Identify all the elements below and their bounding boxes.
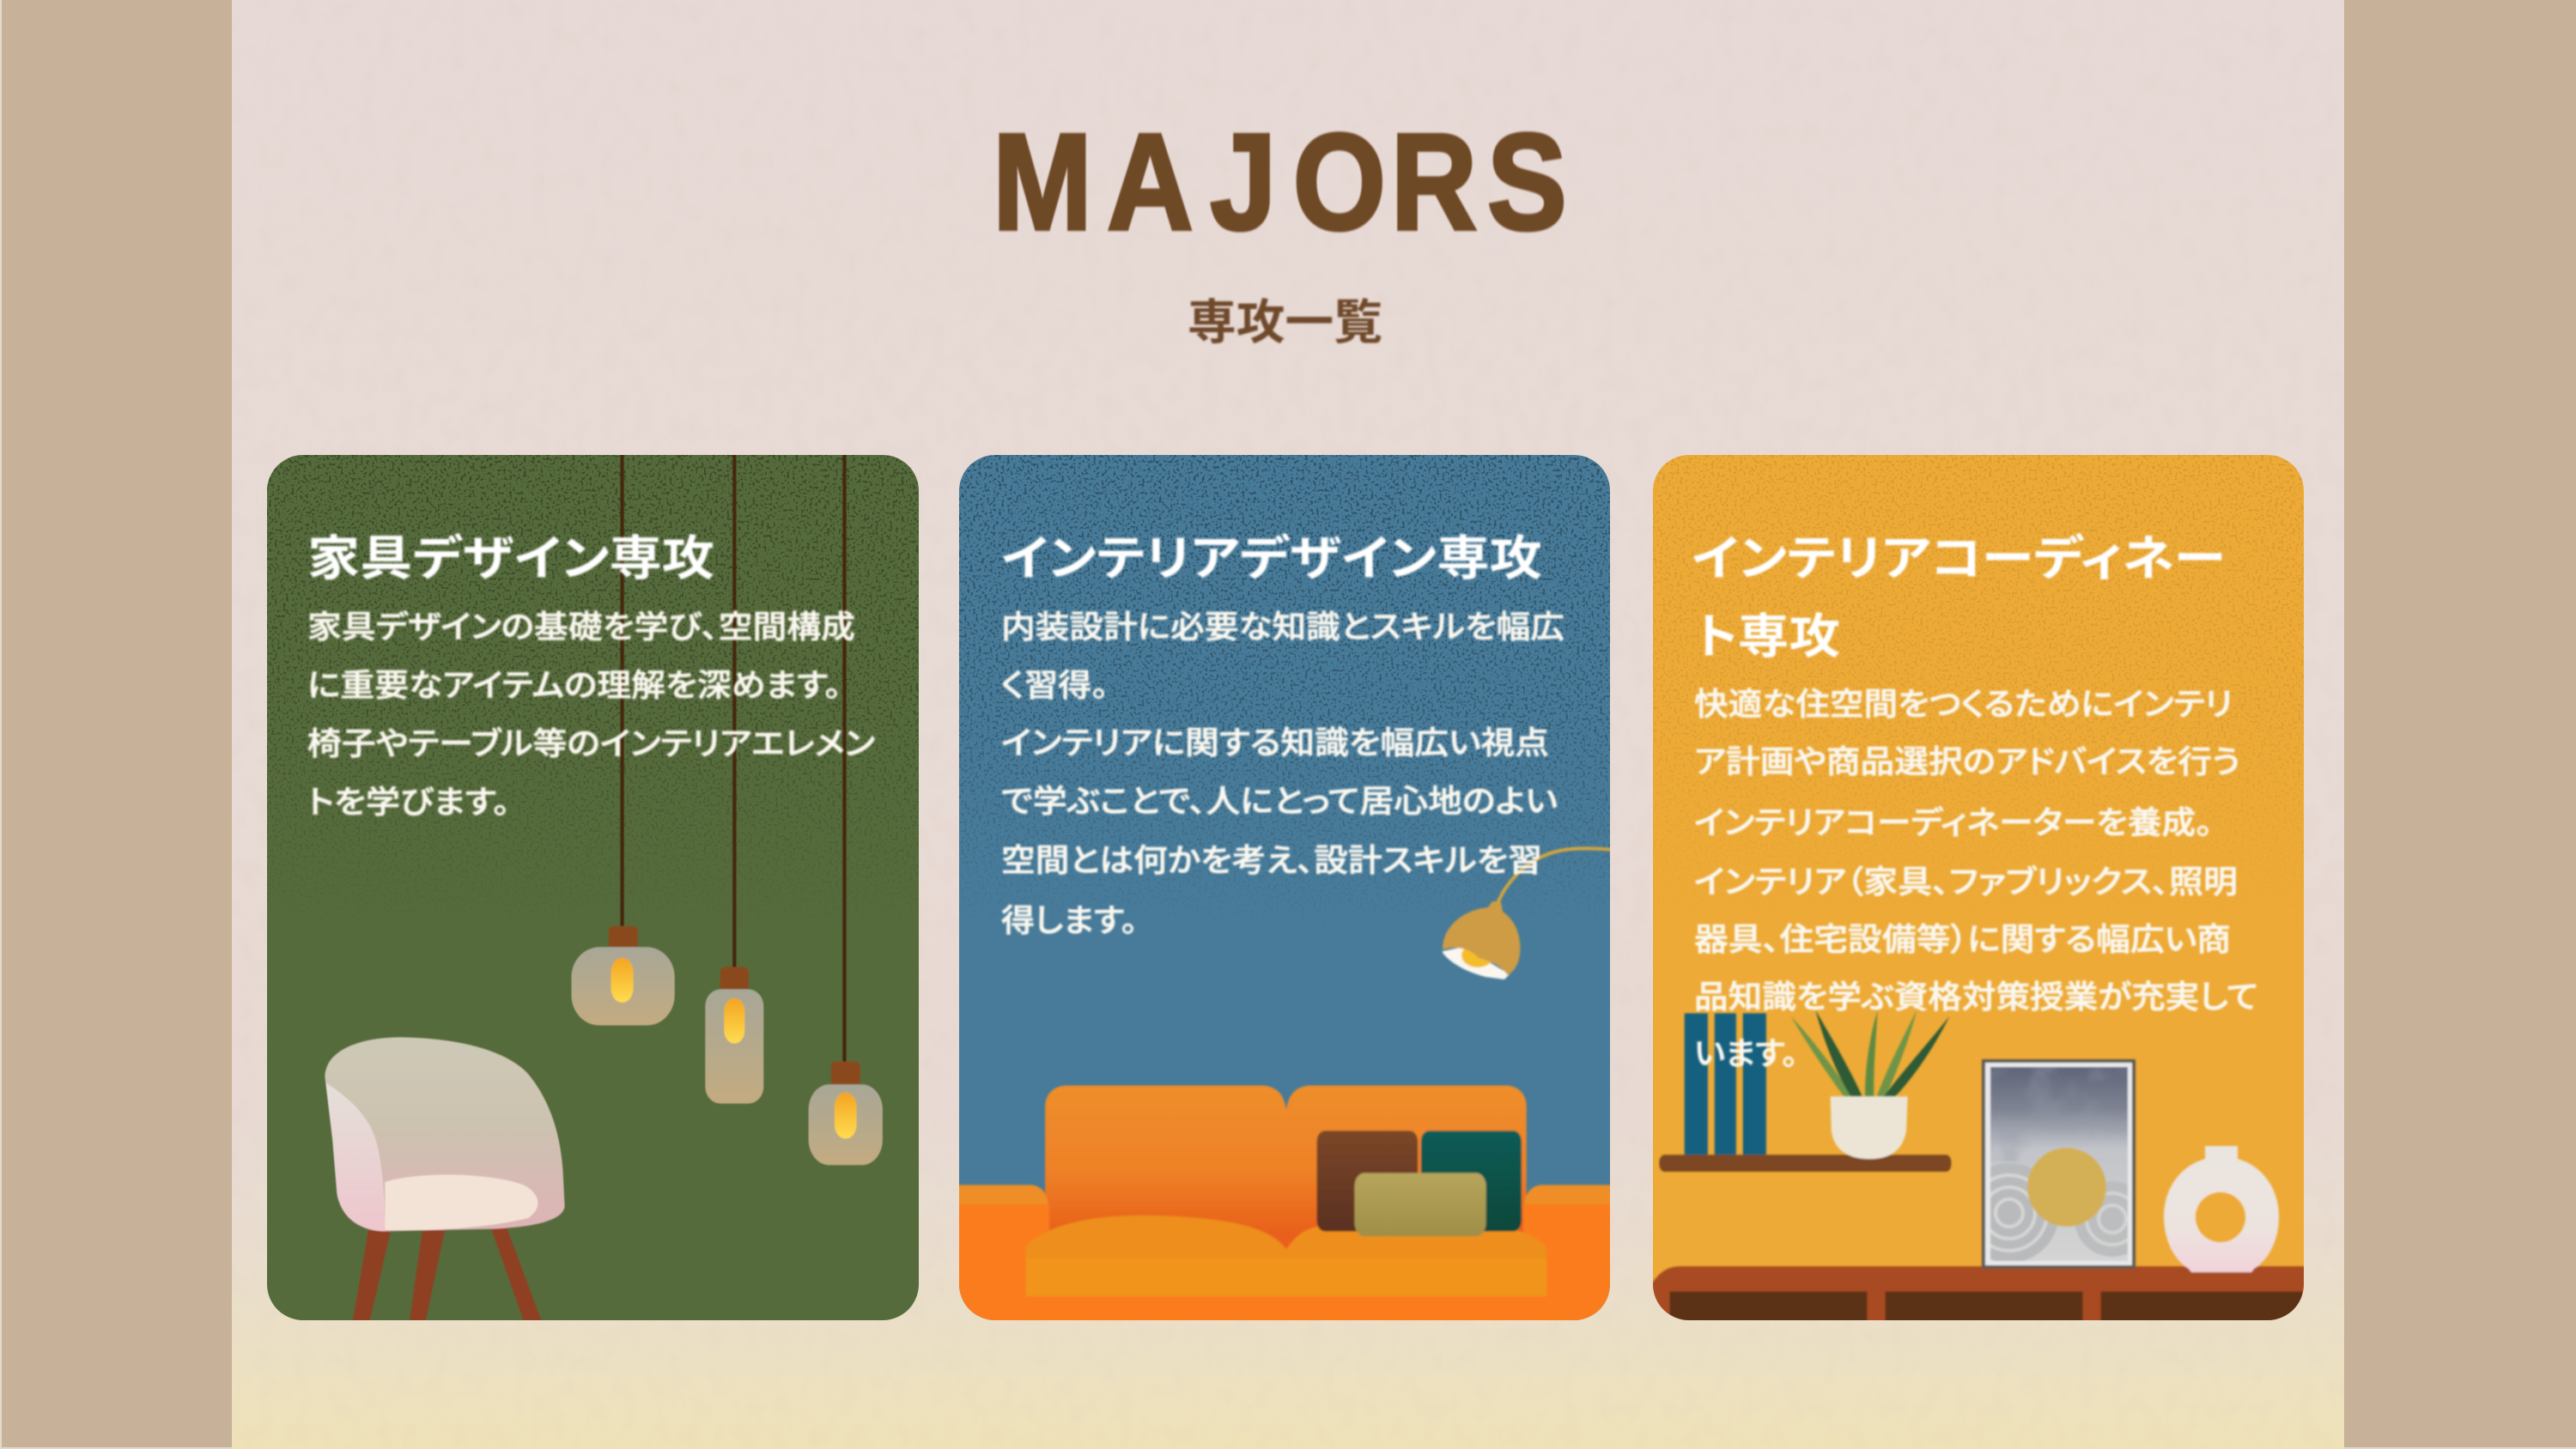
text block: interior design description: く習得。 (1001, 668, 1109, 703)
cushions (1317, 1131, 1522, 1236)
framed picture (1959, 1059, 2150, 1269)
vase (2164, 1146, 2279, 1272)
text block: interior design description: インテリアに関する知識を幅広い視点 (1001, 725, 1549, 761)
heading: interior design: インテリアデザイン専攻 (1001, 531, 1542, 585)
text block: furniture design description: トを学びます。 (307, 785, 510, 820)
cabinet (1649, 1266, 2310, 1332)
floor lamp (1443, 848, 1614, 979)
text block: interior design description (1001, 609, 1564, 938)
heading: interior coordinate: ト専攻 (1695, 609, 1840, 664)
text block: interior coordinate description: インテリア（家具、ファブリックス、照明 (1694, 864, 2238, 900)
text block: interior coordinate description: 品知識を学ぶ資格対策授業が充実して (1694, 979, 2258, 1015)
pendant lamp 1 (571, 447, 675, 1025)
pendant lamp 2 (705, 447, 763, 1104)
text block: interior coordinate description: 快適な住空間をつくるためにインテリ (1694, 687, 2233, 722)
panel: interior design major (954, 455, 1616, 1332)
text block: interior design description: で学ぶことで、人にとって居心地のよい (1001, 784, 1558, 819)
title: MAJORS (993, 105, 1567, 258)
chair (325, 1037, 565, 1326)
illustration: pendant lamps and chair (325, 447, 883, 1326)
text block: interior design description: 内装設計に必要な知識とスキルを幅広 (1001, 609, 1564, 645)
text block: furniture design description: 椅子やテーブル等のインテリアエレメン (307, 726, 875, 761)
text block: furniture design description: に重要なアイテムの理解を深めます。 (307, 668, 841, 703)
heading: interior coordinate: インテリアコーディネー (1692, 531, 2226, 585)
books (1685, 1013, 1766, 1155)
panel: interior coordinate major (1649, 455, 2310, 1332)
heading: interior coordinate (1692, 531, 2226, 664)
text block: interior coordinate description: ア計画や商品選択のアドバイスを行う (1694, 744, 2240, 779)
text block: interior coordinate description: 器具、住宅設備等）に関する幅広い商 (1694, 922, 2231, 957)
text block: furniture design description: 家具デザインの基礎を学び、空間構成 (307, 609, 855, 645)
sofa (954, 1086, 1616, 1332)
potted plant (1791, 1010, 1949, 1159)
text block: interior coordinate description: います。 (1694, 1036, 1798, 1071)
wall shelf (1659, 1155, 1951, 1172)
text block: interior design description: 得します。 (1001, 903, 1138, 938)
pendant lamp 3 (809, 447, 883, 1165)
illustration: shelf, plant, picture, vase, cabinet (1649, 1010, 2310, 1332)
text block: interior coordinate description: インテリアコーディネーターを養成。 (1694, 805, 2213, 840)
heading: furniture design: 家具デザイン専攻 (307, 531, 714, 585)
text block: interior coordinate description (1694, 687, 2258, 1071)
text block: furniture design description (307, 609, 875, 820)
illustration: sofa and floor lamp (954, 848, 1616, 1332)
subtitle: 専攻一覧 (1188, 295, 1382, 349)
panel: furniture design major (267, 447, 919, 1326)
text block: interior design description: 空間とは何かを考え、設計スキルを習 (1001, 843, 1542, 878)
